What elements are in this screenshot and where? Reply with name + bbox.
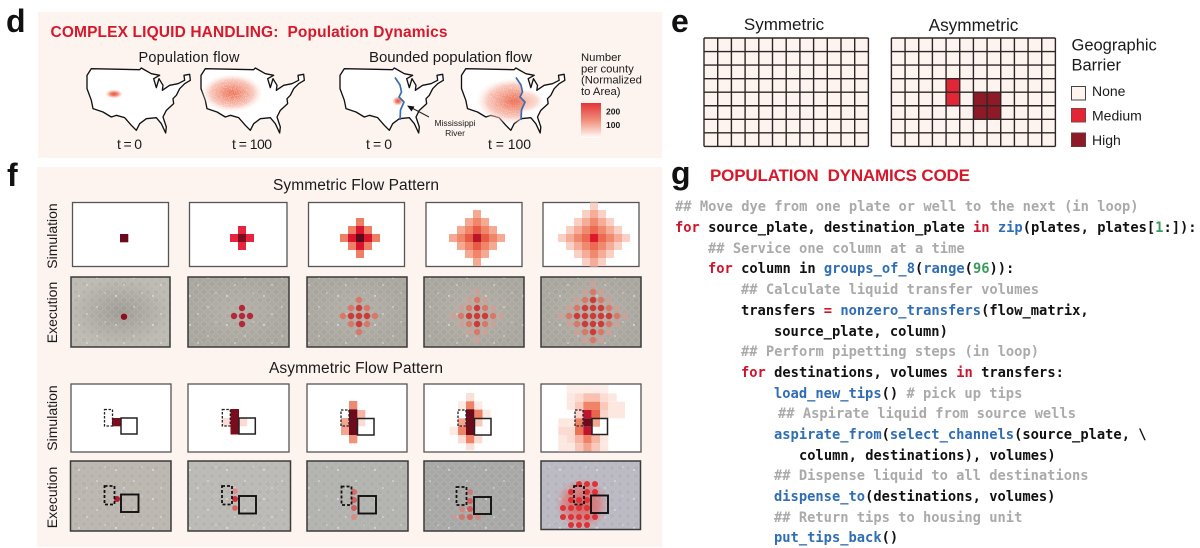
label: t=100: t = 100 — [232, 136, 272, 152]
map: bounded flow t=0 with river — [340, 68, 443, 133]
label: t=0: t = 0 — [117, 136, 142, 152]
color legend: 200 — [606, 106, 620, 116]
panel e: symmetric grid — [704, 15, 868, 146]
asymmetric simulation 4 — [424, 384, 524, 452]
code block: put_tips_back() — [774, 530, 898, 546]
heading: asymmetric flow pattern: Asymmetric Flow Pattern — [269, 360, 443, 377]
heading: population dynamics code: POPULATION DYNAMICS CODE — [710, 166, 970, 185]
asymmetric simulation 2 — [188, 384, 289, 452]
execution 4 — [424, 277, 524, 347]
color legend: (Normalized — [581, 75, 642, 87]
arrow: to Mississippi River — [407, 106, 429, 117]
color legend: Number — [581, 52, 621, 64]
color legend: 100 — [606, 120, 620, 130]
code block: column, destinations), volumes) — [799, 448, 1056, 464]
simulation 2 — [190, 202, 287, 266]
asymmetric execution 4 — [424, 461, 524, 531]
legend: geographic barrier: High — [1092, 132, 1121, 148]
simulation 3 — [308, 202, 404, 266]
code block: ## Dispense liquid to all destinations — [774, 468, 1089, 484]
heading: population flow: Population flow — [138, 50, 240, 66]
code block: ## Aspirate liquid from source wells — [778, 406, 1076, 422]
execution 5 — [541, 277, 641, 352]
asymmetric execution 5 — [541, 461, 640, 530]
panel label e: e — [671, 3, 689, 39]
code block: transfers = nonzero_transfers(flow_matrix, — [741, 303, 1089, 319]
heading: bounded population flow: Bounded population flow — [369, 49, 532, 66]
panel d title: COMPLEX LIQUID HANDLING: Population Dynamics — [50, 24, 448, 41]
code block: source_plate, column) — [774, 324, 948, 340]
code block: for column in groups_of_8(range(96)): — [708, 261, 1014, 277]
row label: execution: Execution — [44, 282, 60, 343]
medium barrier cells — [946, 79, 960, 106]
execution 2 — [188, 277, 289, 347]
asymmetric execution 2 — [188, 461, 290, 531]
code block: ## Move dye from one plate or well to the next (in loop) — [675, 199, 1139, 215]
color legend: to Area) — [581, 86, 621, 98]
code block: ## Return tips to housing unit — [774, 510, 1022, 526]
panel d: population dynamics maps — [38, 12, 662, 158]
panel e: symmetric grid: Symmetric — [744, 15, 825, 34]
label: t=0 bounded: t = 0 — [366, 136, 392, 152]
label: t=100 bounded: t = 100 — [488, 136, 531, 152]
code block: dispense_to(destinations, volumes) — [774, 489, 1055, 505]
label: Mississippi River: Mississippi — [434, 118, 476, 128]
map: population flow t=0 — [87, 68, 190, 133]
legend: geographic barrier: None — [1092, 83, 1126, 99]
legend: geographic barrier: Geographic — [1072, 36, 1157, 54]
panel label d: d — [6, 3, 26, 39]
row label: execution asymmetric: Execution — [44, 467, 60, 528]
row label: simulation: Simulation — [44, 203, 60, 269]
asymmetric simulation 3 — [307, 384, 407, 452]
asymmetric execution 1 — [70, 461, 171, 531]
color legend: per county — [581, 63, 634, 75]
asymmetric simulation 5 — [541, 384, 641, 452]
panel e: asymmetric grid: Asymmetric — [929, 15, 1019, 35]
label: Mississippi River: River — [445, 128, 465, 138]
legend: geographic barrier: Barrier — [1072, 56, 1122, 74]
panel label f: f — [7, 157, 18, 193]
map: bounded flow t=100 with river — [462, 68, 565, 133]
code block: aspirate_from(select_channels(source_plate, \ — [774, 427, 1147, 443]
code block: for source_plate, destination_plate in zip(plates, plates[1:]): — [675, 220, 1197, 236]
code block: ## Perform pipetting steps (in loop) — [741, 344, 1039, 360]
heading: symmetric flow pattern: Symmetric Flow Pattern — [273, 177, 439, 194]
panel label g: g — [671, 155, 691, 191]
simulation 4 — [426, 202, 522, 266]
code block: load_new_tips() # pick up tips — [774, 386, 1022, 402]
execution 1 — [71, 277, 170, 347]
legend: geographic barrier — [1072, 36, 1157, 148]
code block: ## Service one column at a time — [708, 241, 965, 257]
asymmetric simulation 1 — [71, 384, 171, 452]
asymmetric execution 3 — [307, 461, 408, 531]
simulation 1 — [72, 202, 168, 266]
color legend — [581, 52, 642, 138]
row label: simulation asymmetric: Simulation — [44, 385, 60, 451]
code block — [675, 199, 1197, 546]
map: population flow t=100 — [201, 68, 304, 133]
code block: ## Calculate liquid transfer volumes — [741, 282, 1039, 298]
panel e: asymmetric grid — [891, 15, 1055, 146]
legend: geographic barrier: Medium — [1092, 108, 1142, 124]
simulation 5 — [543, 202, 639, 274]
panel f: flow patterns — [37, 167, 662, 547]
code block: for destinations, volumes in transfers: — [741, 365, 1064, 381]
high barrier cells — [973, 92, 1001, 119]
execution 3 — [307, 277, 407, 347]
